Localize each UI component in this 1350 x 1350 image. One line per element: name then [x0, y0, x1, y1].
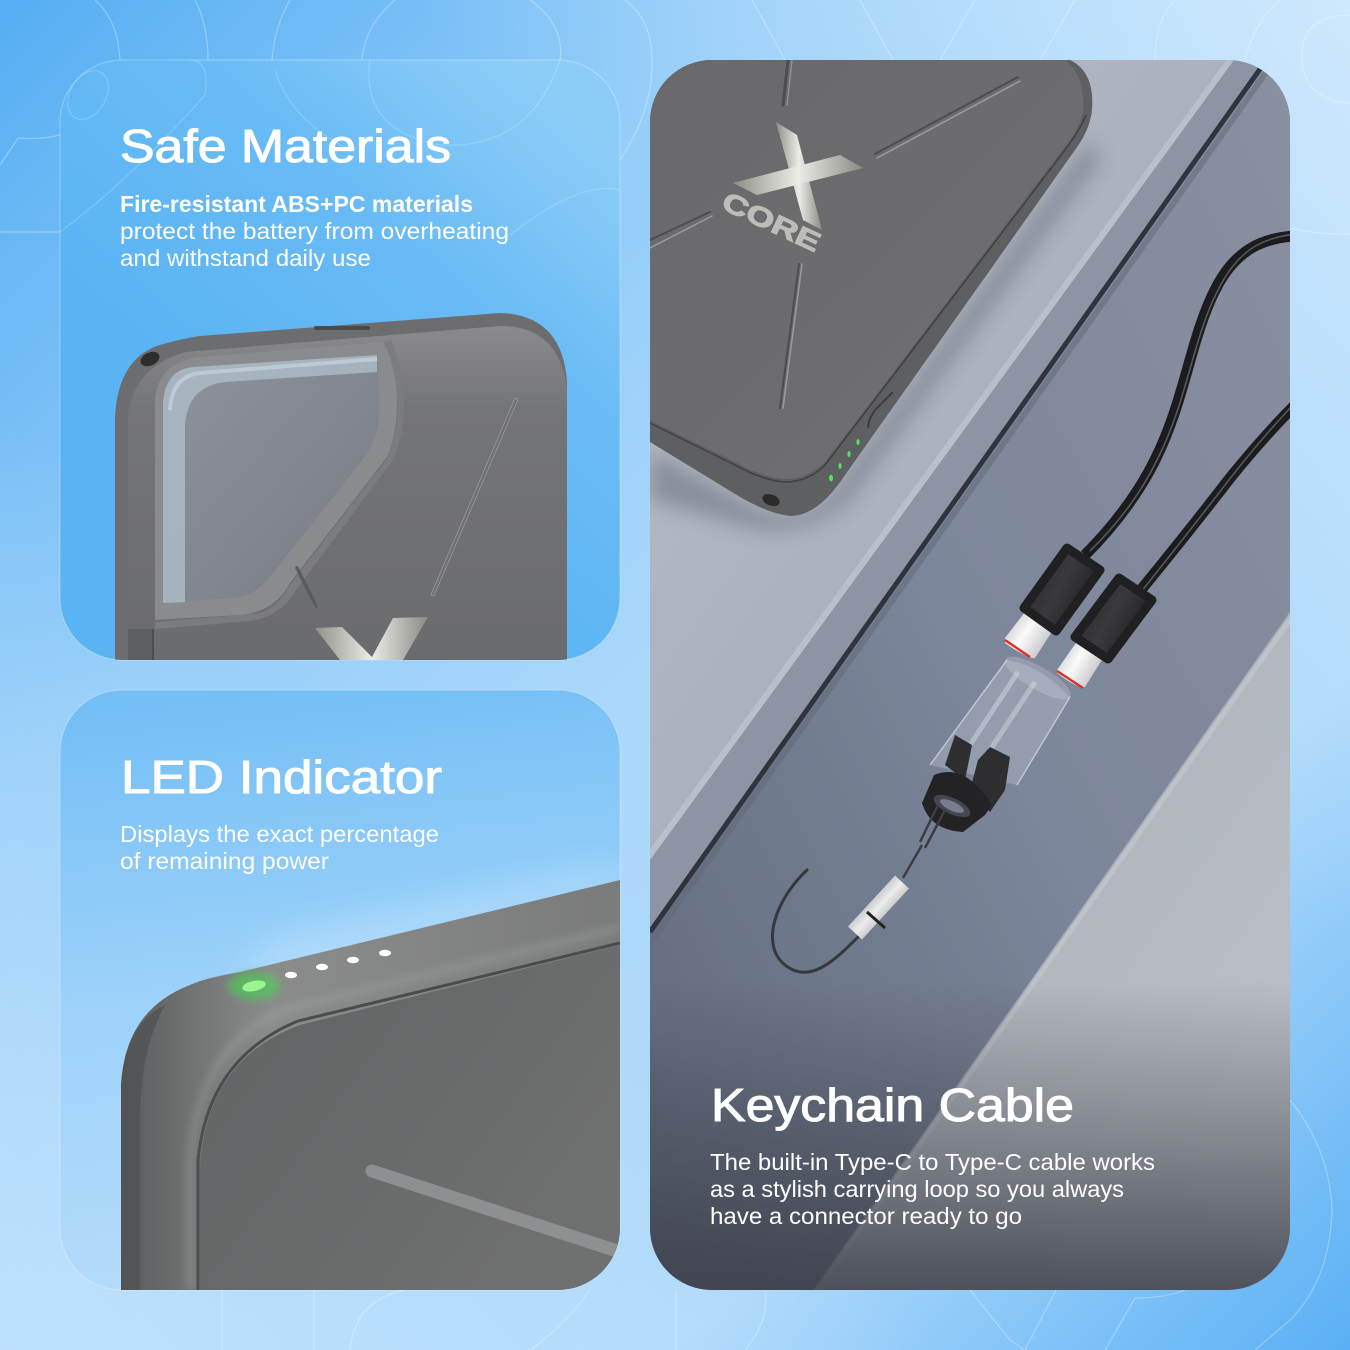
panel: safe materials [59, 60, 620, 660]
slots [433, 400, 516, 594]
slots [650, 60, 1020, 408]
panel: keychain cable [650, 60, 1295, 1290]
x core logo: CORE [717, 186, 825, 258]
text: safe materials description: protect the battery from overheating [120, 218, 509, 244]
power bank [650, 60, 1092, 516]
shadow of device [650, 140, 1100, 531]
cables [1085, 234, 1295, 596]
text: keychain description: The built-in Type-C to Type-C cable works [710, 1149, 1155, 1175]
usb port and hole [314, 326, 370, 330]
surface bands [650, 60, 1290, 1290]
usb-c connector left [1005, 548, 1100, 658]
text: safe materials description: Fire-resistant ABS+PC materials [120, 191, 473, 217]
heading: safe materials: Safe Materials [120, 120, 451, 172]
text: led description: of remaining power [120, 848, 329, 874]
usb-c connector right [1057, 578, 1152, 688]
text: led description: Displays the exact percentage [120, 821, 439, 847]
x core logo [717, 122, 863, 258]
text: keychain description: as a stylish carrying loop so you always [710, 1176, 1124, 1202]
text: safe materials description: and withstand daily use [120, 245, 371, 271]
text: led description [120, 821, 439, 874]
slot [372, 1171, 620, 1252]
glow above device [249, 866, 614, 969]
bottom shade [650, 980, 1290, 1290]
text: safe materials description [120, 191, 509, 271]
hook wire with metal barrel [772, 805, 945, 972]
text: keychain description [710, 1149, 1155, 1229]
leds [228, 950, 391, 1000]
power bank with transparent window [115, 313, 567, 660]
power bank corner [121, 880, 620, 1290]
text: keychain description: have a connector ready to go [710, 1203, 1022, 1229]
panel: led indicator [60, 690, 620, 1290]
clear cap with keyring [922, 650, 1076, 832]
charge leds [829, 439, 860, 481]
window [185, 378, 379, 601]
heading: keychain cable: Keychain Cable [711, 1079, 1074, 1131]
heading: led indicator: LED Indicator [121, 751, 442, 803]
x logo [315, 617, 428, 660]
side button and hole [868, 392, 893, 428]
